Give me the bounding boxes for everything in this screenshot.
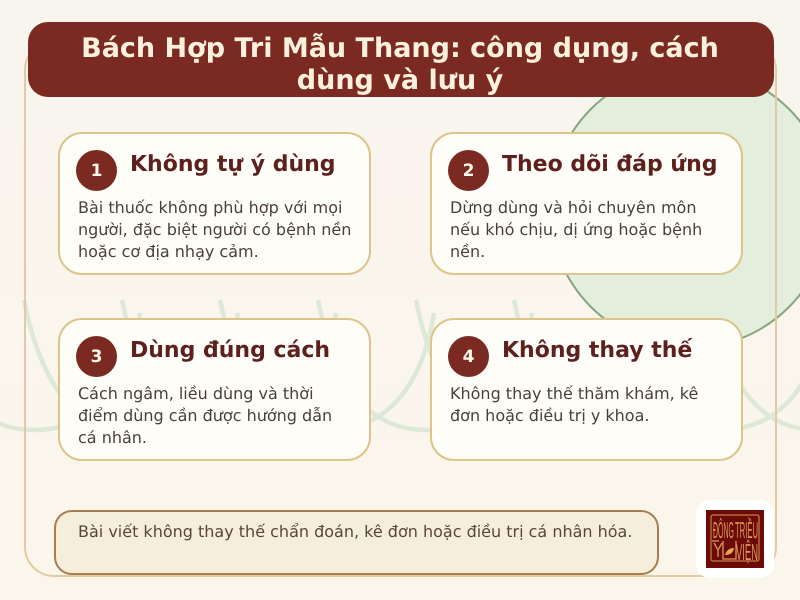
logo [696,500,774,578]
disclaimer box [54,510,659,575]
card 2 text: Dừng dùng và hỏi chuyên môn [450,198,696,217]
card 2 text: nền. [450,242,485,261]
card 4 text [450,384,698,425]
card 4 text: Không thay thế thăm khám, kê [450,384,698,403]
card 3 text: cá nhân. [78,428,147,447]
card 1 heading: Không tự ý dùng [130,152,336,177]
disclaimer box: Bài viết không thay thế chẩn đoán, kê đơn hoặc điều trị cá nhân hóa. [78,522,632,541]
card 3 heading: Dùng đúng cách [130,338,330,363]
number badge 2 [448,150,489,191]
number badge 1 [76,150,117,191]
card 1 text: Bài thuốc không phù hợp với mọi [78,198,342,217]
number badge 3: 3 [91,347,102,367]
card 4 heading: Không thay thế [502,338,692,363]
card 1 [58,132,371,275]
card 3 text: Cách ngâm, liều dùng và thời [78,384,314,403]
green circle [549,67,800,349]
card 2 heading: Theo dõi đáp ứng [502,152,718,177]
card 2 text [450,198,702,261]
number badge 1: 1 [91,161,102,181]
card 3 text: điểm dùng cần được hướng dẫn [78,406,332,425]
number badge 3 [76,336,117,377]
card 2 text: nếu khó chịu, dị ứng hoặc bệnh [450,220,702,239]
card 1 text: hoặc cơ địa nhạy cảm. [78,242,259,261]
number badge 2: 2 [463,161,474,181]
title banner: dùng và lưu ý [297,65,503,96]
title banner: Bách Hợp Tri Mẫu Thang: công dụng, cách [81,33,719,64]
card 2 [430,132,743,275]
card 3 [58,318,371,461]
card 4 text: đơn hoặc điều trị y khoa. [450,406,649,425]
card 1 text: người, đặc biệt người có bệnh nền [78,220,351,239]
card 3 text [78,384,332,447]
card 1 text [78,198,351,261]
number badge 4 [448,336,489,377]
number badge 4: 4 [463,347,474,367]
card 4 [430,318,743,461]
title banner [28,22,774,97]
